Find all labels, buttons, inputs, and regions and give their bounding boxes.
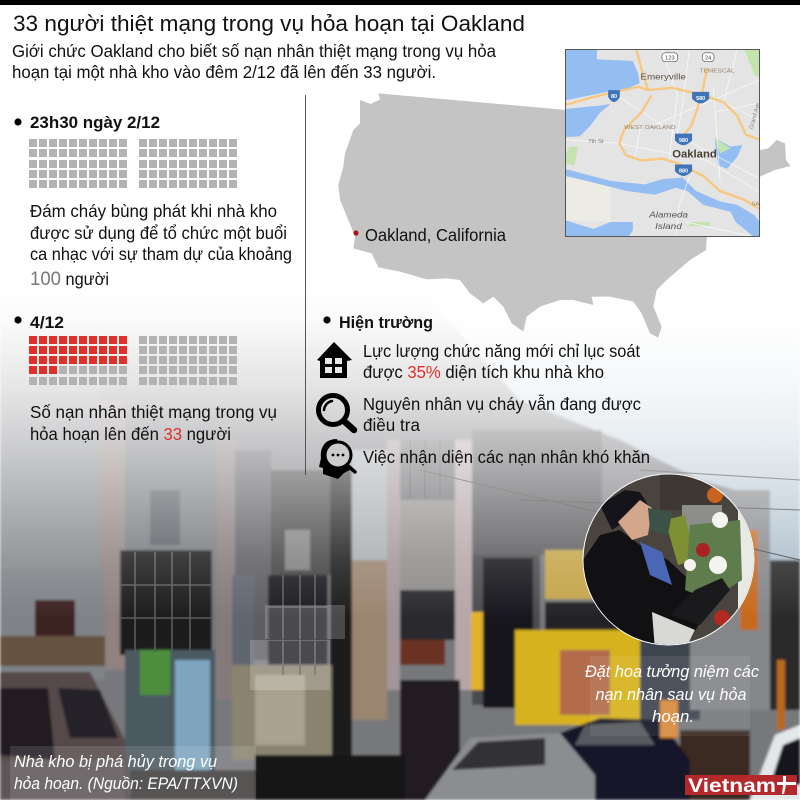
inset street map of Oakland: Lincoln Ave	[692, 236, 721, 242]
inset street map of Oakland: 7th St	[588, 139, 604, 145]
people grid: 100 attendees	[29, 139, 237, 188]
text: 35 percent searched	[363, 341, 640, 382]
icon: magnifying glass	[318, 396, 354, 430]
photo caption: mourners: hoạn.	[652, 707, 694, 726]
inset street map of Oakland: 24	[705, 56, 712, 62]
logo: Vietnam+: Vietnam	[688, 776, 776, 797]
inset street map of Oakland: Grand Ave	[749, 102, 762, 130]
text: cause under investigation	[363, 394, 641, 435]
description text: ca nhạc với sự tham dự của khoảng	[30, 244, 292, 264]
inset street map of Oakland	[565, 49, 765, 242]
photo caption: mourners: Đặt hoa tưởng niệm các	[585, 662, 759, 681]
interstate shields	[608, 90, 709, 176]
interstate shields: 980	[679, 138, 688, 144]
inset street map of Oakland: WEST OAKLAND	[624, 125, 676, 131]
heading: Hiện trường: Hiện trường	[339, 313, 433, 332]
description text	[30, 201, 292, 290]
interstate shields: 880	[679, 169, 688, 175]
inset street map of Oakland: Island	[655, 221, 682, 231]
US map silhouette	[338, 93, 791, 338]
interstate shields: 580	[696, 96, 705, 102]
photo caption: mourners: nạn nhân sau vụ hỏa	[596, 685, 746, 704]
text: victim identification: Việc nhận diện các nạn nhân khó khăn	[363, 447, 650, 467]
inset street map of Oakland: Emeryville	[640, 73, 686, 82]
panel: 23h30 timeline	[14, 113, 292, 290]
text: cause under investigation: điều tra	[363, 415, 420, 435]
inset street map of Oakland: Alameda	[648, 210, 688, 220]
panel: 4/12 death toll	[14, 313, 277, 444]
circular photo: mourners with flowers	[580, 470, 760, 650]
intro text: hoạn tại một nhà kho vào đêm 2/12 đã lên đến 33 người.	[12, 62, 436, 82]
photo caption: warehouse	[10, 746, 256, 800]
text: cause under investigation: Nguyên nhân vụ cháy vẫn đang được	[363, 394, 641, 414]
description text	[30, 402, 277, 444]
location marker	[353, 230, 359, 236]
inset street map of Oakland: 123	[665, 56, 675, 62]
description text: hỏa hoạn lên đến 33 người	[30, 424, 231, 444]
title: 33 người thiệt mạng trong vụ hỏa hoạn tại Oakland	[13, 11, 525, 36]
panel: scene findings	[317, 313, 650, 479]
people grid: 33 victims in red	[29, 336, 237, 385]
icon: head with magnifier	[319, 439, 355, 479]
heading: 23h30: 23h30 ngày 2/12	[30, 113, 160, 132]
photo caption: warehouse: Nhà kho bị phá hủy trong vụ	[14, 752, 218, 771]
description text: Số nạn nhân thiệt mạng trong vụ	[30, 402, 277, 422]
background photo: damaged warehouse	[0, 285, 800, 800]
white fade over photo	[0, 285, 800, 620]
heading: 4/12: 4/12	[30, 313, 64, 332]
icon: house	[317, 342, 352, 378]
bullet	[323, 316, 331, 324]
bullet	[14, 118, 22, 126]
top black bar	[0, 0, 800, 5]
description text: được sử dụng để tổ chức một buổi	[30, 223, 287, 243]
interstate shields: 80	[611, 94, 617, 100]
description text: Đám cháy bùng phát khi nhà kho	[30, 201, 277, 221]
text: 35 percent searched: được 35% diện tích khu nhà kho	[363, 362, 604, 382]
text: 35 percent searched: Lực lượng chức năng mới chỉ lục soát	[363, 341, 640, 361]
location label: Oakland, California	[365, 225, 506, 245]
window mullions	[120, 440, 800, 675]
bullet	[14, 316, 22, 324]
inset street map of Oakland: Oakland	[672, 149, 717, 161]
inset street map of Oakland: TEMESCAL	[700, 68, 735, 74]
photo watermark	[250, 605, 345, 690]
photo caption: warehouse: hỏa hoạn. (Nguồn: EPA/TTXVN)	[14, 774, 238, 793]
photo caption: mourners	[585, 656, 759, 736]
intro text: Giới chức Oakland cho biết số nạn nhân thiệt mạng trong vụ hỏa	[12, 41, 496, 61]
intro text	[12, 41, 496, 82]
description text: 100 người	[30, 268, 109, 290]
logo: Vietnam+	[685, 775, 797, 797]
vertical divider	[305, 95, 306, 475]
inset street map of Oakland: SAN	[752, 202, 764, 208]
